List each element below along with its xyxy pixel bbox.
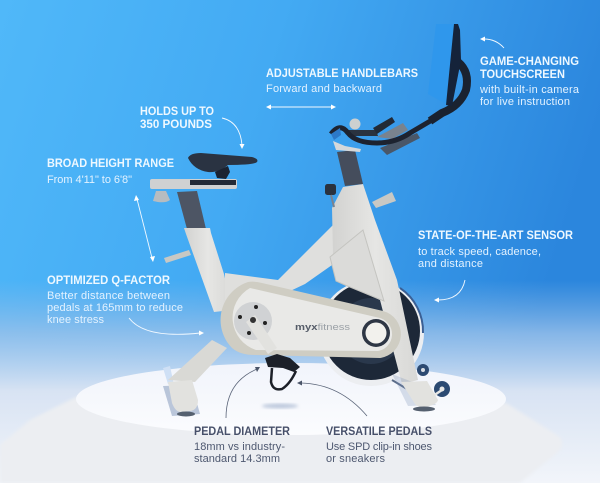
callout: sensor [418,230,574,270]
callout: height range: From 4'11" to 6'8" [47,174,132,186]
callout: height range: BROAD HEIGHT RANGE [47,158,174,170]
crank hub [234,302,272,340]
callout: sensor: STATE-OF-THE-ART SENSOR [418,230,574,242]
chain case [221,282,401,358]
callout: q-factor: Better distance between [47,290,170,302]
callout: seat capacity [140,106,214,131]
main frame top tube [225,225,342,310]
seat rail [150,179,237,202]
touchscreen [428,24,461,106]
arrow: touchscreen [480,36,504,48]
callout: versatile pedals: Use SPD clip-in shoes [326,441,432,453]
rear stabilizer wheels [392,364,450,398]
seat height pin [164,250,191,263]
callout: versatile pedals: VERSATILE PEDALS [326,426,432,438]
callout: sensor: to track speed, cadence, [418,246,541,258]
callout: q-factor [47,275,183,326]
callout: height range [47,158,174,186]
resistance knob [325,184,336,207]
callout: touchscreen: with built-in camera [479,84,580,96]
callout: q-factor: knee stress [47,314,104,326]
drive cap [362,319,390,347]
front pin [372,192,396,208]
callout: versatile pedals [326,426,432,465]
platform [0,363,562,483]
callout: pedal diameter [194,426,291,465]
arrow: q-factor [129,318,204,336]
seat post [177,191,206,229]
arrow: versatile pedals [297,380,367,416]
seat tube [184,228,232,312]
callout: touchscreen: TOUCHSCREEN [480,69,565,81]
exercise bike [150,24,467,416]
callout: touchscreen: for live instruction [480,96,570,108]
callout: adjustable handlebars [266,68,418,95]
front post [337,150,363,186]
callout: q-factor: pedals at 165mm to reduce [47,302,183,314]
rear foot [392,374,438,412]
callout: versatile pedals: or sneakers [326,453,386,465]
saddle [188,153,257,179]
front foot [163,340,227,416]
logo: myx fitness [295,322,350,333]
callout: seat capacity: HOLDS UP TO [140,106,214,118]
pedal [265,354,300,389]
arrow: height range [134,195,155,262]
crank arm [246,315,277,354]
callout: pedal diameter: 18mm vs industry- [194,441,285,453]
front column [332,184,418,384]
handlebars [331,117,432,155]
callout: seat capacity: 350 POUNDS [140,119,212,131]
sensor panel [330,230,384,301]
callout: pedal diameter: standard 14.3mm [194,453,280,465]
arrow: pedal diameter [226,367,260,418]
touchscreen arm [430,62,467,121]
arrow: sensor [434,280,465,302]
arrow: handlebars [266,104,336,110]
callout: touchscreen: GAME-CHANGING [480,56,579,68]
flywheel [318,280,424,386]
callout: q-factor: OPTIMIZED Q-FACTOR [47,275,171,287]
arrow: seat capacity [222,118,244,149]
callout: adjustable handlebars: Forward and backward [266,83,382,95]
callout: adjustable handlebars: ADJUSTABLE HANDLEBARS [266,68,418,80]
callout: pedal diameter: PEDAL DIAMETER [194,426,291,438]
callout: touchscreen [479,56,580,108]
callout: sensor: and distance [418,258,483,270]
